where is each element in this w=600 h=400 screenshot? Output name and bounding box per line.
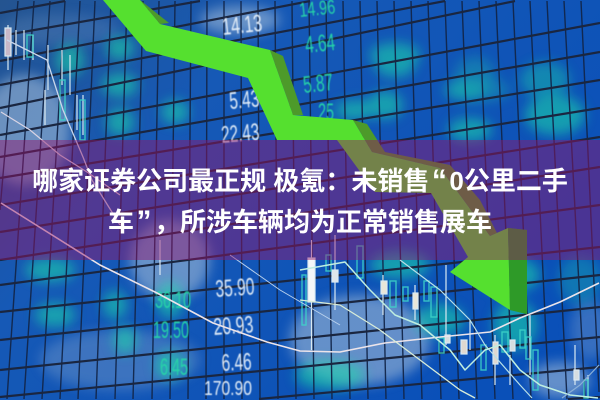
green downward arrow bbox=[103, 0, 527, 314]
headline bbox=[32, 164, 568, 238]
market numbers: 170.90 bbox=[204, 378, 252, 400]
market numbers: 35.90 bbox=[215, 273, 255, 303]
market numbers: 19.50 bbox=[153, 317, 189, 344]
market numbers: 25 bbox=[318, 99, 334, 126]
market numbers: 6.46 bbox=[221, 348, 252, 377]
market numbers: 6.45 bbox=[160, 354, 188, 381]
market numbers: 5.43 bbox=[228, 85, 260, 115]
market numbers: 5.87 bbox=[302, 69, 334, 99]
headline line 1: “ bbox=[432, 164, 447, 197]
market numbers bbox=[153, 0, 336, 400]
purple title band bbox=[0, 140, 600, 260]
headline line 2: ” bbox=[136, 205, 152, 238]
market numbers: 14.13 bbox=[221, 10, 263, 41]
market numbers: 20.93 bbox=[213, 311, 254, 341]
market numbers: 36.10 bbox=[155, 287, 191, 314]
market numbers: 4.64 bbox=[304, 29, 336, 59]
market numbers: 22.43 bbox=[220, 119, 260, 149]
headline line 2: 车 ，所涉车辆均为正常销售展车 bbox=[108, 207, 492, 237]
headline line 1: 哪家证券公司最正规 极氪：未销售 0公里二手 bbox=[32, 166, 568, 196]
